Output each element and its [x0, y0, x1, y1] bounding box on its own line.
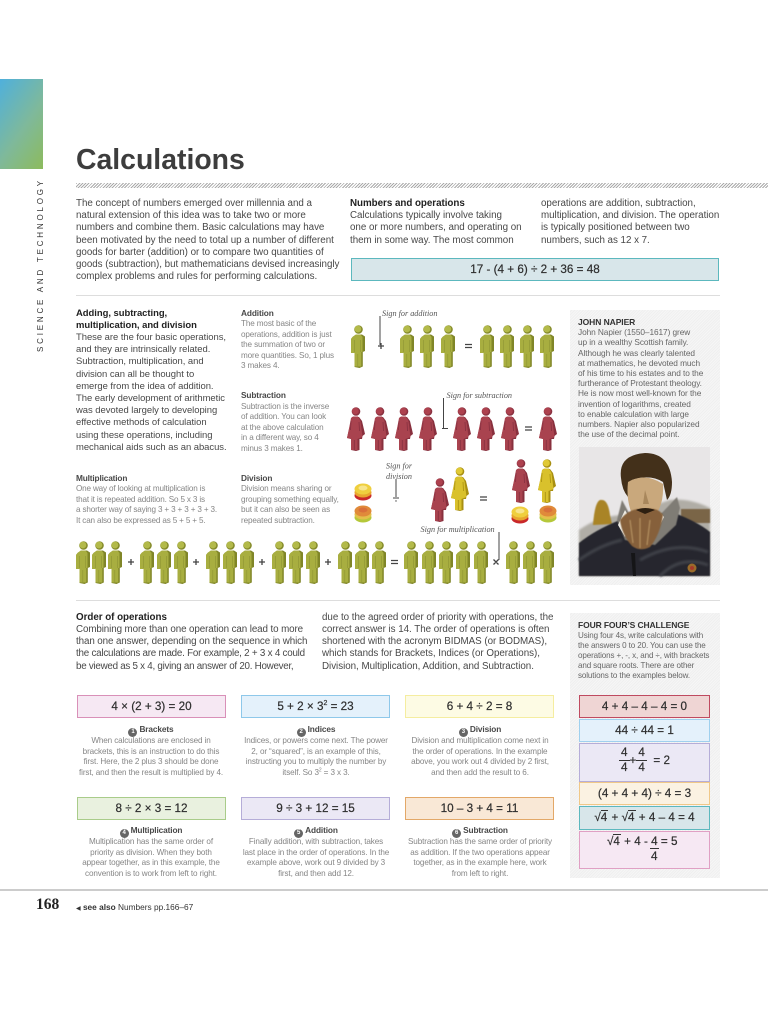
adding, subtracting text: These are the four basic operations, — [76, 332, 226, 343]
subtraction text: Subtraction — [241, 390, 286, 400]
multiplication text: Multiplication — [76, 472, 127, 482]
challenge: answer 2: 4 — [621, 746, 628, 759]
caption: indices — [244, 724, 388, 776]
caption: subtraction: together, as in the example here, work — [413, 858, 547, 867]
caption: addition: example above, work out 9 divided by 3 — [247, 858, 385, 867]
multiplication text — [76, 472, 217, 524]
equation: subtraction: 10 – 3 + 4 = 11 — [441, 802, 518, 815]
equation: brackets: 4 × (2 + 3) = 20 — [111, 700, 192, 713]
adding, subtracting text: was devoted largely to developing — [76, 405, 217, 416]
intro text: goods for barter (addition) or to compare two quantities of — [76, 247, 324, 258]
caption: brackets — [79, 724, 223, 776]
caption: indices: itself. So 32 = 3 x 3. — [282, 767, 350, 776]
numbers and operations text: one or more numbers, and operating on — [350, 222, 522, 233]
subtraction text: of addition. You can look — [241, 412, 326, 421]
addition text: The most basic of the — [241, 319, 316, 328]
order of operations text: than one answer, depending on the sequence in which — [76, 636, 307, 647]
multiplication text: a shorter way of saying 3 + 3 + 3 + 3 + 3. — [76, 505, 217, 514]
adding, subtracting text: division can all be thought to — [76, 369, 194, 380]
order of operations text, column 2: which stands for Brackets, Indices (or Operations), — [322, 648, 540, 659]
annotation: sign for division: Sign for — [386, 462, 413, 470]
adding, subtracting text: The early development of arithmetic — [76, 393, 225, 404]
annotation: sign for addition: Sign for addition — [382, 309, 438, 318]
equation: division: 6 + 4 ÷ 2 = 8 — [447, 700, 512, 713]
caption: indices: Indices — [308, 724, 335, 734]
numbers and operations text: them in some way. The most common — [350, 235, 514, 246]
multiplication text: that it is repeated addition. So 5 x 3 is — [76, 494, 205, 504]
division text: Division means sharing or — [241, 484, 331, 493]
panel: four four's challenge — [570, 613, 720, 878]
addition text: more quantities. So, 1 plus — [241, 350, 334, 360]
caption: division: the order of operations. In the example — [413, 746, 547, 756]
equation: division — [405, 695, 554, 718]
caption: multiplication: Multiplication — [131, 825, 182, 835]
challenge text: FOUR FOUR’S CHALLENGE — [578, 620, 689, 630]
challenge: answer 5 — [579, 831, 710, 869]
multiplication text: One way of looking at multiplication is — [76, 484, 205, 493]
caption: division: Division — [470, 724, 501, 734]
division figures — [354, 459, 556, 524]
challenge: answer 2: 4 — [638, 761, 645, 774]
intro text — [76, 198, 340, 282]
challenge: answer 5: √4 + 4 - 4 = 5 — [607, 835, 677, 848]
equation banner — [351, 258, 719, 281]
annotation: sign for multiplication: Sign for multiplication — [420, 525, 495, 534]
multiplication text: It can also be expressed as 5 + 5 + 5. — [76, 516, 205, 524]
subtraction text — [241, 390, 329, 452]
addition figures — [351, 325, 554, 368]
order of operations text: be viewed as 5 x 4, giving an answer of 20. However, — [76, 661, 293, 672]
challenge: answer 3: (4 + 4 + 4) ÷ 4 = 3 — [598, 787, 691, 800]
numbers and operations text: Numbers and operations — [350, 198, 465, 209]
Napier text: at mathematics, he devoted much — [578, 358, 700, 368]
caption: division: and then add the result to 6. — [431, 768, 529, 776]
order of operations text: Order of operations — [76, 612, 167, 623]
adding, subtracting text — [76, 308, 227, 453]
caption: indices: instructing you to multiply the number by — [246, 757, 386, 766]
subtraction text: Subtraction is the inverse — [241, 402, 329, 410]
annotation: sign for division: division — [386, 472, 412, 481]
caption: brackets: first. Here, the 2 plus 3 should be done — [84, 757, 218, 766]
numbers and operations text, column 2: numbers, such as 12 x 7. — [541, 235, 650, 246]
order of operations text, column 2: due to the agreed order of priority with operations, the — [322, 612, 553, 623]
division text: Division — [241, 472, 272, 482]
division text: repeated subtraction. — [241, 516, 315, 524]
caption: indices: 2, or “squared”, is an example of this, — [251, 746, 381, 756]
addition text — [241, 308, 334, 370]
order of operations text, column 2: Division, Multiplication, Addition, and Subtraction. — [322, 661, 534, 672]
Napier text: up in a wealthy Scottish family. — [578, 337, 688, 347]
intro text: goods (subtraction), but mathematicians devised increasingly — [76, 259, 339, 270]
order of operations text: Combining more than one operation can lead to more — [76, 624, 303, 635]
caption: division: above, you work out 4 divided by 2 first, — [411, 757, 549, 766]
caption: brackets: When calculations are enclosed in — [91, 736, 211, 745]
subtraction text: minus 3 makes 1. — [241, 444, 303, 452]
caption: subtraction: as addition. If the two operations appear — [410, 848, 550, 856]
challenge: answer 1 — [579, 719, 710, 742]
intro text: The concept of numbers emerged over millennia and a — [76, 198, 312, 209]
equation: addition: 9 ÷ 3 + 12 = 15 — [276, 802, 355, 815]
adding, subtracting text: and they are intrinsically related. — [76, 344, 210, 355]
challenge: answer 5: 4 — [651, 850, 658, 863]
caption: addition: last place in the order of operations. In the — [243, 848, 389, 856]
adding, subtracting text: using these operations, including — [76, 430, 212, 441]
division text — [241, 472, 339, 524]
caption: multiplication — [82, 825, 220, 878]
adding, subtracting text: emerge from the idea of addition. — [76, 381, 214, 392]
challenge: answer 2: 4 — [621, 761, 628, 774]
challenge: answer 2 — [579, 743, 710, 782]
challenge text: and square roots. There are other — [578, 661, 694, 670]
panel: John Napier — [570, 310, 720, 585]
challenge: answer 0: 4 + 4 – 4 – 4 = 0 — [602, 700, 687, 713]
adding, subtracting text: mechanical aids such as an abacus. — [76, 442, 227, 453]
caption: addition: 5 — [297, 830, 300, 836]
annotation: sign for multiplication — [420, 525, 499, 560]
Napier text: John Napier (1550–1617) grew — [578, 327, 690, 337]
equation: brackets — [77, 695, 226, 718]
equation: addition — [241, 797, 390, 820]
caption: addition: first, and then add 12. — [278, 868, 354, 878]
Napier text: to enable calculation with large — [578, 409, 689, 419]
Napier text: Although he was clearly talented — [578, 348, 695, 358]
addition text: 3 makes 4. — [241, 361, 280, 370]
annotation: sign for addition — [380, 309, 438, 345]
order of operations text, column 2: shortened with the acronym BIDMAS (or BODMAS), — [322, 636, 547, 647]
caption: addition — [243, 825, 389, 878]
order of operations text, column 2 — [322, 612, 553, 672]
addition text: operations, addition is just — [241, 330, 332, 338]
multiplication figures — [76, 541, 554, 584]
section label: SCIENCE AND TECHNOLOGY — [36, 178, 45, 352]
intro text: complex problems and rules for performing calculations. — [76, 271, 317, 282]
caption: multiplication: 4 — [122, 830, 126, 836]
Napier text: of his time to his estates and to the — [578, 368, 703, 378]
page number: 168 — [36, 896, 59, 913]
challenge: answer 3 — [579, 782, 710, 805]
title: Calculations — [76, 144, 245, 176]
challenge: answer 2: + = 2 — [630, 754, 670, 767]
equation: multiplication — [77, 797, 226, 820]
challenge: answer 2: 4 — [638, 746, 645, 759]
intro text: numbers and combine them. Basic calculations may have — [76, 222, 324, 233]
portrait of John Napier — [579, 447, 710, 576]
addition text: Addition — [241, 308, 274, 318]
Napier text: JOHN NAPIER — [578, 317, 635, 327]
caption: multiplication: Multiplication has the same order of — [89, 837, 213, 846]
caption: subtraction — [408, 825, 552, 878]
caption: division: Division and multiplication come next in — [411, 736, 548, 745]
caption: addition: Addition — [305, 825, 338, 835]
addition text: the summation of two or — [241, 340, 325, 349]
Napier text — [578, 317, 703, 439]
Napier text: He is now most well-known for the — [578, 388, 701, 398]
annotation: sign for subtraction — [442, 391, 512, 428]
challenge: answer 4: √4 + √4 + 4 – 4 = 4 — [594, 811, 695, 824]
equation: multiplication: 8 ÷ 2 × 3 = 12 — [115, 802, 188, 815]
equation: subtraction — [405, 797, 554, 820]
caption: addition: Finally addition, with subtraction, takes — [249, 837, 383, 846]
numbers and operations text, column 2: multiplication, and division. The operation — [541, 210, 719, 221]
subtraction text: in a different way, so 4 — [241, 433, 319, 442]
challenge: answer 0 — [579, 695, 710, 718]
caption: division: 3 — [462, 729, 465, 735]
division text: grouping something equally, — [241, 494, 339, 504]
adding, subtracting text: Subtraction, multiplication, and — [76, 356, 204, 367]
subtraction figures — [347, 407, 557, 451]
caption: brackets: first, and then the result is multiplied by 4. — [79, 768, 223, 776]
order of operations text, column 2: correct answer is 14. The order of operations is often — [322, 624, 549, 635]
caption: brackets: Brackets — [139, 724, 174, 734]
caption: division — [411, 724, 549, 776]
challenge: answer 1: 44 ÷ 44 = 1 — [615, 724, 674, 737]
numbers and operations text, column 2 — [541, 198, 719, 246]
challenge text — [578, 620, 710, 680]
cross reference: ◀ see also Numbers pp.166–67 — [76, 902, 193, 912]
adding, subtracting text: Adding, subtracting, — [76, 308, 167, 318]
equation: indices — [241, 695, 390, 718]
division text: but it can also be seen as — [241, 505, 330, 514]
intro text: been motivated by the need to total up a number of different — [76, 235, 334, 246]
caption: indices: 2 — [300, 729, 303, 735]
order of operations text — [76, 612, 307, 672]
caption: brackets: 1 — [131, 729, 135, 735]
Napier text: invention of logarithms, created — [578, 399, 691, 409]
caption: multiplication: convention is to work from left to right. — [85, 868, 217, 878]
annotation: sign for subtraction: Sign for subtraction — [446, 391, 512, 400]
caption: multiplication: priority as division. When they both — [90, 848, 212, 856]
caption: subtraction: Subtraction — [463, 825, 508, 835]
challenge text: operations +, -, x, and ÷, with brackets — [578, 651, 709, 660]
equation banner: 17 - (4 + 6) ÷ 2 + 36 = 48 — [470, 263, 600, 276]
Napier text: numbers. Napier also popularized — [578, 419, 700, 429]
Napier text: furtherance of Protestant theology. — [578, 378, 702, 388]
annotation: sign for division — [386, 462, 413, 502]
numbers and operations text, column 2: is typically positioned between two — [541, 222, 690, 233]
adding, subtracting text: multiplication, and division — [76, 320, 197, 331]
caption: subtraction: 6 — [455, 830, 458, 836]
challenge text: the answers 0 to 20. You can use the — [578, 641, 706, 650]
caption: brackets: brackets, this is an instruction to do this — [83, 746, 219, 756]
challenge: answer 4 — [579, 806, 710, 830]
caption: subtraction: Subtraction has the same order of priority — [408, 837, 552, 846]
order of operations text: the calculations are made. For example, 2 + 3 x 4 could — [76, 648, 305, 659]
challenge text: Using four 4s, write calculations with — [578, 631, 703, 640]
Napier text: the use of the decimal point. — [578, 429, 679, 439]
intro text: natural extension of this idea was to take two or more — [76, 210, 306, 221]
caption: multiplication: appear together, as in this example, the — [82, 858, 220, 867]
colour tab — [0, 79, 43, 169]
caption: subtraction: from left to right. — [452, 868, 508, 878]
numbers and operations text — [350, 198, 522, 246]
numbers and operations text: Calculations typically involve taking — [350, 210, 502, 221]
numbers and operations text, column 2: operations are addition, subtraction, — [541, 198, 696, 209]
subtraction text: at the above calculation — [241, 422, 324, 432]
adding, subtracting text: effective methods of calculation — [76, 417, 207, 428]
caption: indices: Indices, or powers come next. The power — [244, 736, 388, 745]
challenge text: solutions to the examples below. — [578, 671, 690, 680]
equation: indices: 5 + 2 × 32 = 23 — [277, 700, 354, 713]
